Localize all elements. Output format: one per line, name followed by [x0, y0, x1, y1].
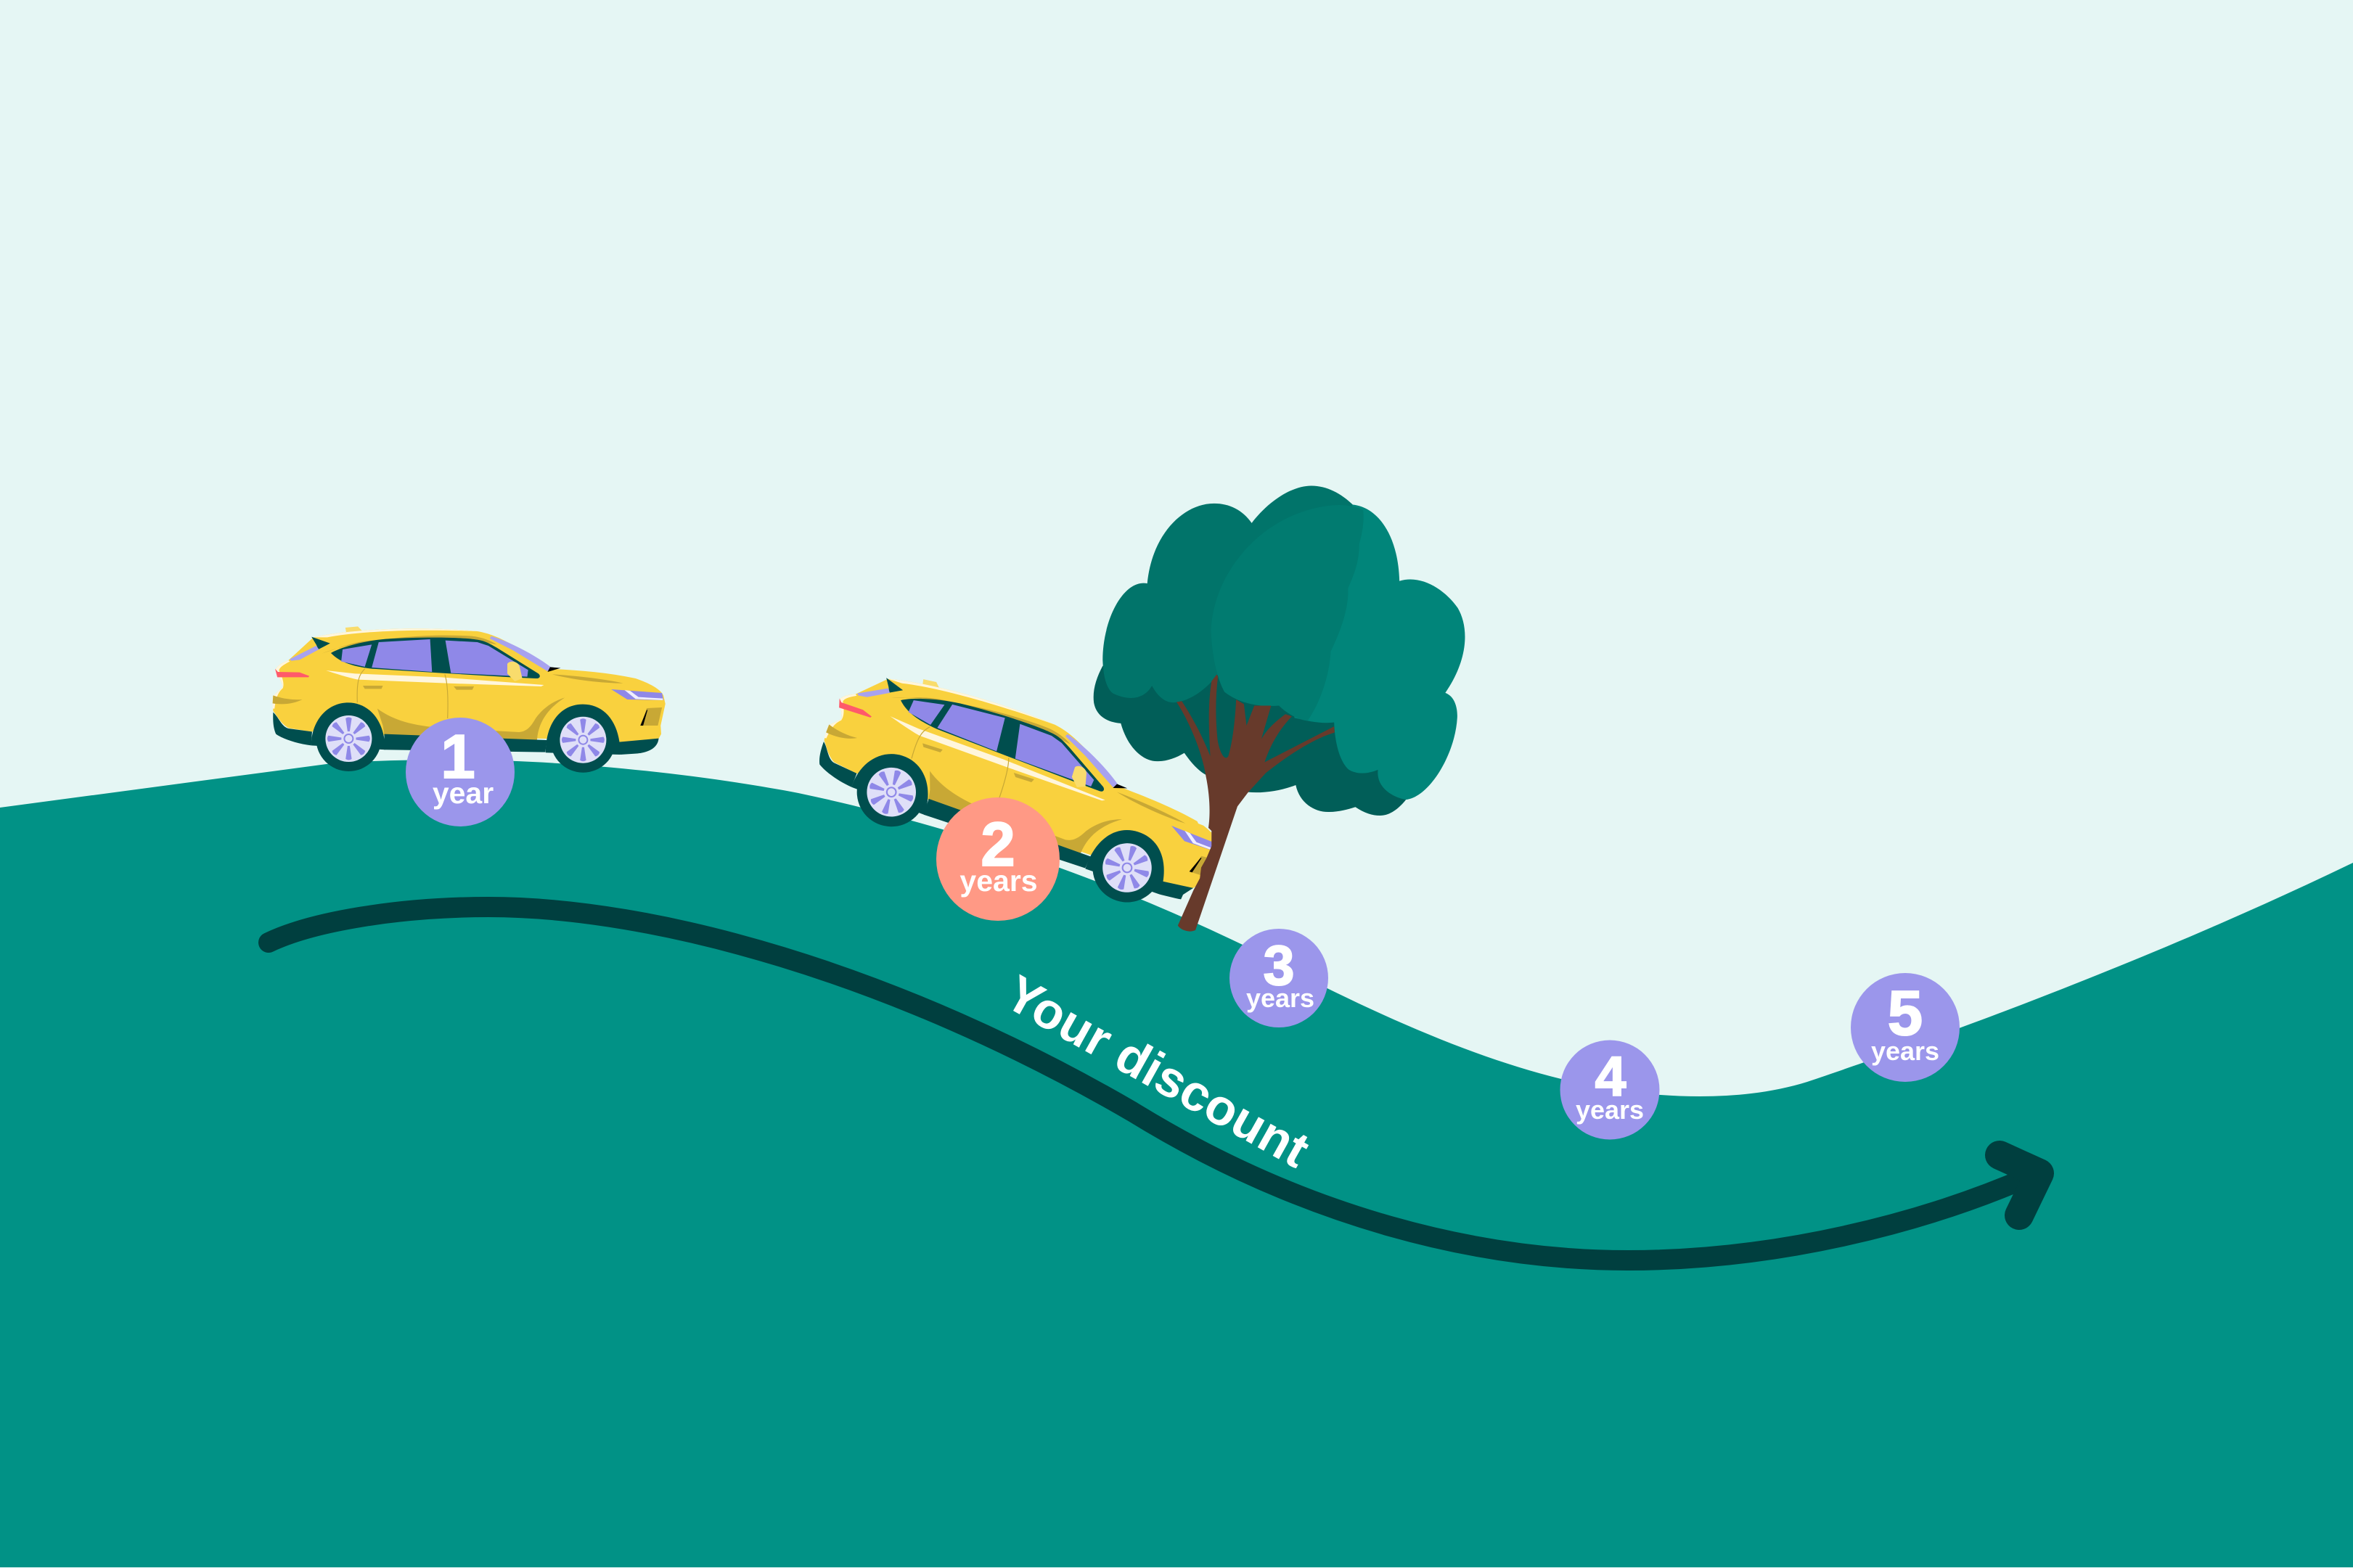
infographic scene: [0, 486, 2353, 1567]
tree: [1094, 485, 1465, 932]
rear body shade: [273, 695, 303, 704]
label: your discount: Your discount: [997, 964, 1319, 1178]
windows: [341, 639, 528, 677]
badge: 4 years: 4: [1595, 1046, 1626, 1108]
shadow above windows: [322, 636, 496, 654]
car on level road: [273, 626, 666, 773]
side mirror: [507, 662, 523, 681]
badge: 3 years: [1229, 929, 1328, 1027]
hill: [0, 760, 2353, 1567]
badge: 4 years: years: [1576, 1095, 1644, 1125]
badge: 2 years: [936, 797, 1060, 921]
badge: 5 years: years: [1871, 1036, 1939, 1066]
crashed car: [819, 678, 1212, 903]
badge: 5 years: [1851, 973, 1960, 1082]
badge: 4 years: [1560, 1040, 1659, 1139]
lower body shade: [377, 697, 565, 740]
badge: 3 years: 3: [1264, 935, 1294, 997]
headlight: [611, 689, 663, 700]
badge: 2 years: years: [959, 864, 1038, 898]
badge: 1 year: year: [433, 776, 494, 810]
front wheel: [550, 707, 615, 773]
front vent: [640, 710, 647, 726]
door lines and handles: [357, 669, 448, 718]
window frame: [331, 638, 540, 678]
back canopy: [1094, 632, 1406, 816]
right canopy: [1282, 505, 1465, 800]
taillight: [275, 669, 309, 677]
rear wheel: [316, 706, 381, 771]
rear purple trim: [290, 646, 319, 661]
rear edge highlight: [273, 660, 290, 709]
front canopy: [1211, 505, 1364, 721]
windshield tip: [547, 667, 560, 672]
badge: 1 year: [406, 718, 515, 826]
white body stripe: [326, 670, 544, 686]
discount trend arrow: [269, 907, 2039, 1260]
trunk and branches: [1176, 675, 1335, 932]
roof highlight: [314, 628, 478, 637]
mid canopy: [1102, 485, 1353, 702]
roof nub: [345, 626, 362, 633]
car body: [273, 628, 666, 742]
spoiler: [311, 637, 330, 649]
windshield strip: [490, 636, 552, 671]
badge: 1 year: 1: [441, 723, 475, 792]
badge: 3 years: years: [1246, 983, 1314, 1013]
badge: 2 years: 2: [981, 810, 1015, 879]
badge: 5 years: 5: [1888, 978, 1923, 1048]
lower dark trim: [273, 702, 659, 755]
